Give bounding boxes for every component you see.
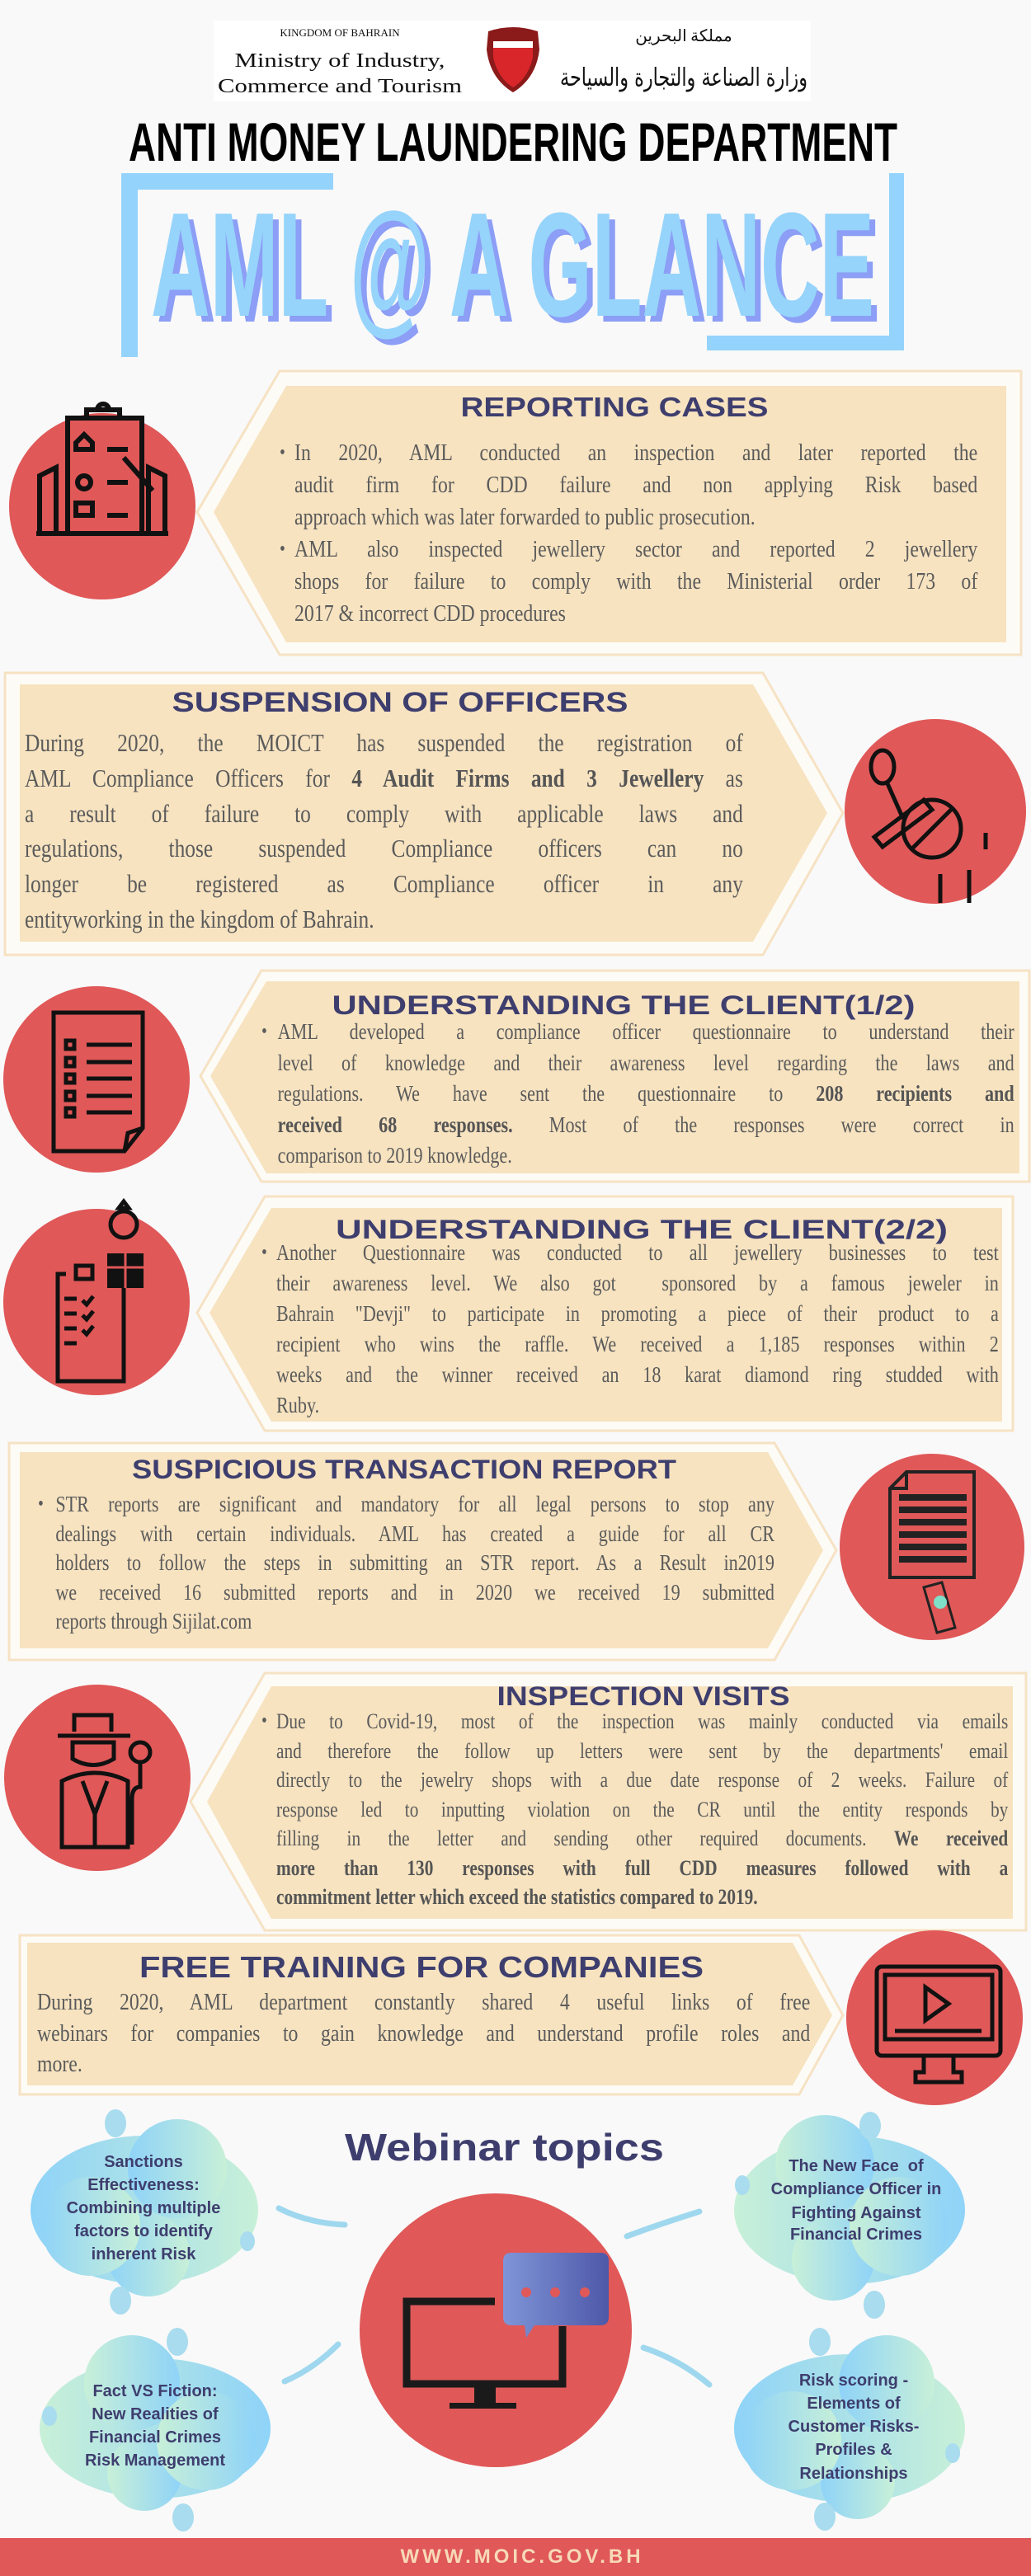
text block: STR: reports through Sijilat.com	[55, 1609, 252, 1634]
text block: reporting bullets	[280, 440, 978, 627]
header logo box	[214, 21, 811, 101]
text block: inspection: and therefore the follow up letters were sent by the departments' email	[276, 1738, 1008, 1763]
text block: free training: more.	[37, 2051, 82, 2077]
cloud: new face of compliance officer: The New Face of	[789, 2157, 924, 2175]
text block: understanding 1: received 68 responses. Most of the responses were correct in	[278, 1112, 1015, 1136]
text block: inspection: response led to inputting violation on the CR until the entity responds by	[276, 1798, 1008, 1821]
text block: STR: •	[38, 1493, 44, 1515]
panel: inspection visits: INSPECTION VISITS	[497, 1681, 790, 1711]
heading: webinar topics: Webinar topics	[345, 2126, 664, 2169]
cloud: risk scoring: Elements of	[807, 2395, 901, 2413]
panel: understanding the client 1/2	[3, 970, 1031, 1182]
icon: emblem	[487, 27, 539, 92]
text block: understanding 2: recipient who wins the raffle. We received a 1,185 responses within 2	[276, 1332, 999, 1356]
panel: understanding the client 2/2	[3, 1196, 1015, 1431]
text block: STR: dealings with certain individuals. AML has created a guide for all CR	[55, 1521, 774, 1545]
text block: inspection	[261, 1709, 1008, 1909]
cloud: sanctions effectiveness: inherent Risk	[92, 2245, 196, 2263]
cloud: risk scoring	[734, 2328, 965, 2531]
text block: understanding 1	[261, 1019, 1015, 1168]
text block: suspension: regulations, those suspended Compliance officers can no	[25, 834, 743, 863]
text block: inspection: commitment letter which exceed the statistics compared to 2019.	[276, 1885, 758, 1909]
text block: understanding 2: Ruby.	[276, 1393, 319, 1417]
cloud: new face of compliance officer	[734, 2112, 965, 2319]
text block: inspection: •	[261, 1710, 267, 1732]
text block: suspension: AML Compliance Officers for 4 Audit Firms and 3 Jewellery as	[25, 764, 743, 792]
text block: understanding 2	[261, 1240, 999, 1417]
icon: central circle with monitor and chat	[360, 2193, 632, 2467]
text block: reporting bullets: In 2020, AML conducted an inspection and later reported the	[294, 440, 977, 466]
header logo box: KINGDOM OF BAHRAIN	[280, 26, 400, 39]
cloud: sanctions effectiveness: Sanctions	[104, 2153, 183, 2171]
text block: understanding 2: Another Questionnaire was conducted to all jewellery businesses to test	[276, 1240, 999, 1265]
text block: free training: webinars for companies to gain knowledge and understand profile roles and	[37, 2020, 810, 2047]
text block: understanding 2: their awareness level. We also got sponsored by a famous jeweler in	[276, 1271, 999, 1295]
text block: reporting bullets: approach which was later forwarded to public prosecution.	[294, 504, 756, 530]
cloud: fact vs fiction: Financial Crimes	[89, 2428, 221, 2447]
text block: reporting bullets: audit firm for CDD failure and non applying Risk based	[294, 472, 977, 498]
text block: inspection: more than 130 responses with full CDD measures followed with a	[276, 1855, 1008, 1880]
text block: free training	[37, 1989, 810, 2077]
text block: reporting bullets: •	[280, 442, 285, 463]
panel: suspicious transaction report	[8, 1441, 1024, 1661]
text block: STR: we received 16 submitted reports and in 2020 we received 19 submitted	[55, 1580, 774, 1605]
text block: understanding 1: level of knowledge and their awareness level regarding the laws and	[278, 1051, 1015, 1075]
text block: suspension: entityworking in the kingdom of Bahrain.	[25, 905, 374, 933]
cloud: new face of compliance officer: Fighting Against	[791, 2204, 921, 2222]
arrows: brush strokes	[279, 2208, 709, 2385]
text block: inspection: directly to the jewelry shops with a due date response of 2 weeks. Failure of	[276, 1768, 1008, 1792]
panel: suspension of officers: SUSPENSION OF OFFICERS	[172, 687, 628, 718]
cloud: sanctions effectiveness: Effectiveness:	[87, 2176, 200, 2194]
cloud: fact vs fiction: Risk Management	[85, 2451, 225, 2470]
footer	[0, 2538, 1031, 2576]
cloud: risk scoring: Profiles &	[815, 2441, 892, 2459]
footer: WWW.MOIC.GOV.BH	[400, 2545, 644, 2568]
header logo box: Ministry of Industry,	[234, 50, 445, 72]
panel: suspension of officers	[3, 671, 1026, 957]
panel: reporting cases	[9, 369, 1023, 656]
text block: suspension: longer be registered as Compliance officer in any	[25, 869, 743, 898]
cloud: risk scoring: Risk scoring -	[799, 2372, 908, 2390]
cloud: sanctions effectiveness: Combining multiple	[67, 2199, 220, 2217]
panel: understanding the client 2/2: UNDERSTANDING THE CLIENT(2/2)	[336, 1215, 948, 1244]
text block: understanding 1: regulations. We have sent the questionnaire to 208 recipients and	[278, 1081, 1015, 1106]
text block: reporting bullets: •	[280, 538, 285, 560]
cloud: new face of compliance officer: Compliance Officer in	[771, 2180, 941, 2198]
cloud: fact vs fiction	[40, 2328, 271, 2531]
cloud: sanctions effectiveness: factors to identify	[74, 2222, 214, 2240]
webinar topics section	[31, 2109, 965, 2531]
text block: understanding 1: AML developed a compliance officer questionnaire to understand their	[278, 1019, 1015, 1044]
text block: understanding 2: Bahrain "Devji" to participate in promoting a piece of their product to a	[276, 1301, 999, 1326]
panel: inspection visits	[4, 1672, 1028, 1931]
cloud: risk scoring: Relationships	[799, 2465, 908, 2483]
text block: inspection: filling in the letter and sending other required documents. We received	[276, 1826, 1008, 1850]
text block: STR	[38, 1492, 774, 1634]
cloud: fact vs fiction: New Realities of	[92, 2405, 219, 2423]
text block: suspension: During 2020, the MOICT has suspended the registration of	[25, 728, 743, 757]
cloud: risk scoring: Customer Risks-	[789, 2418, 919, 2436]
text block: understanding 2: •	[261, 1242, 267, 1263]
panel: reporting cases: REPORTING CASES	[460, 392, 769, 422]
text block: suspension	[25, 728, 743, 933]
text block: understanding 1: •	[261, 1021, 267, 1042]
text block: STR: STR reports are significant and mandatory for all legal persons to stop any	[55, 1492, 774, 1516]
text block: reporting bullets: AML also inspected jewellery sector and reported 2 jewellery	[294, 536, 977, 562]
panel: free training for companies	[18, 1930, 1023, 2105]
text block: inspection: Due to Covid-19, most of the inspection was mainly conducted via emails	[276, 1709, 1008, 1733]
text block: understanding 2: weeks and the winner received an 18 karat diamond ring studded with	[276, 1362, 999, 1387]
text block: understanding 1: comparison to 2019 knowledge.	[278, 1143, 512, 1168]
cloud: sanctions effectiveness	[31, 2109, 258, 2315]
text block: STR: holders to follow the steps in submitting an STR report. As a Result in2019	[55, 1550, 774, 1575]
cloud: new face of compliance officer: Financial Crimes	[790, 2226, 922, 2244]
panel: understanding the client 1/2: UNDERSTANDING THE CLIENT(1/2)	[332, 990, 916, 1020]
panel: free training for companies: FREE TRAINING FOR COMPANIES	[139, 1950, 704, 1984]
panel: suspicious transaction report: SUSPICIOUS TRANSACTION REPORT	[132, 1455, 677, 1484]
text block: reporting bullets: 2017 & incorrect CDD procedures	[294, 600, 566, 627]
text block: free training: During 2020, AML department constantly shared 4 useful links of free	[37, 1989, 810, 2015]
cloud: fact vs fiction: Fact VS Fiction:	[92, 2382, 218, 2400]
header logo box: مملكة البحرين	[635, 22, 732, 46]
text block: reporting bullets: shops for failure to comply with the Ministerial order 173 of	[294, 568, 977, 595]
text block: suspension: a result of failure to comply with applicable laws and	[25, 799, 743, 828]
header logo box: Commerce and Tourism	[218, 76, 462, 97]
